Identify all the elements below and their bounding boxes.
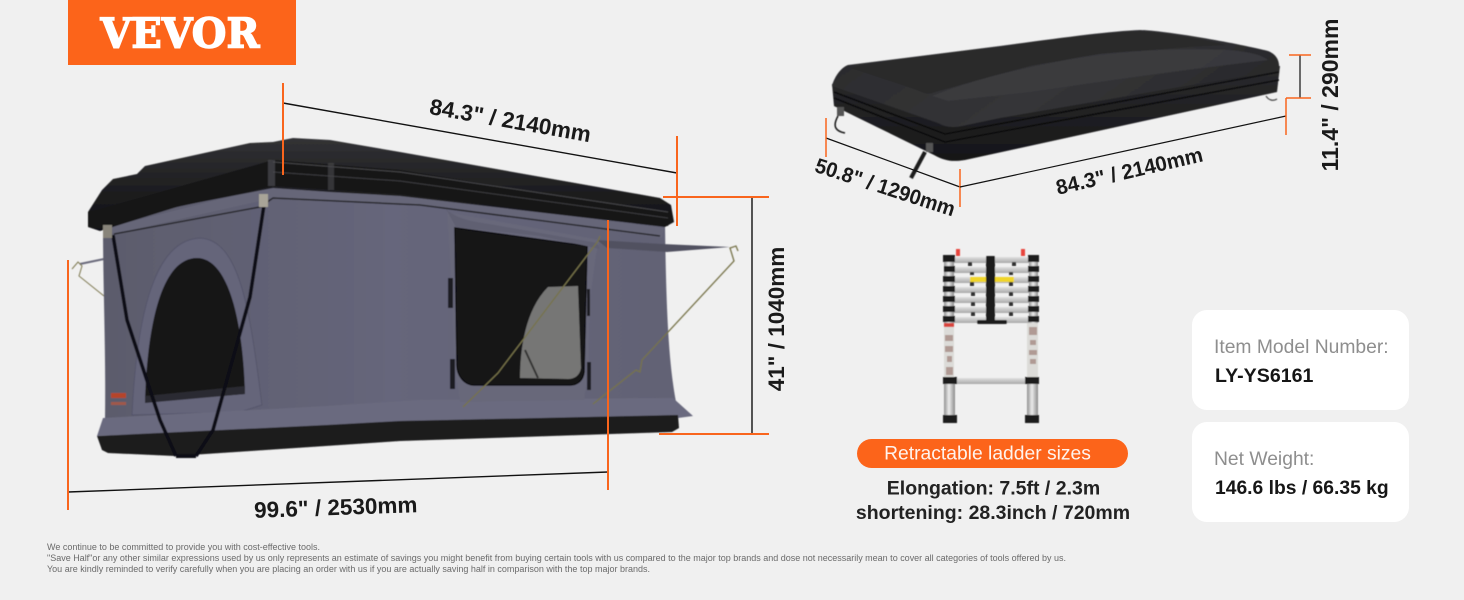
ladder: bottom rung and collars	[957, 378, 1025, 384]
ladder size text: shortening: 28.3inch / 720mm	[856, 502, 1130, 524]
card: item model number: LY-YS6161	[1215, 365, 1314, 387]
footnote disclaimer: You are kindly reminded to verify carefully when you are placing an order with us if you are actually saving half in comparison with the top major brands.	[47, 564, 650, 574]
shell: seam lines	[834, 72, 1279, 142]
tent: rear door opening	[446, 209, 730, 402]
ladder: rail collars	[943, 255, 1039, 322]
shell: base edge	[832, 66, 1280, 161]
footnote disclaimer: We continue to be committed to provide you with cost-effective tools.	[47, 542, 320, 552]
dimension: tent length top: 84.3" / 2140mm	[428, 94, 593, 147]
dimension: shell width	[812, 118, 960, 221]
dimension: tent height: 41" / 1040mm	[764, 247, 789, 391]
dimension: shell height	[1286, 19, 1343, 171]
ladder size text: Elongation: 7.5ft / 2.3m	[887, 478, 1100, 500]
footnote disclaimer: "Save Half"or any other similar expressions used by us only represents an estimate of savings you might benefit from buying certain tools with us compared to the major top brands and dose not necessarily mean to cover all categories of tools offered by us.	[47, 553, 1066, 563]
ladder size pill: Retractable ladder sizes	[884, 444, 1091, 464]
tent: upper canvas band	[105, 186, 664, 238]
tent: skirt	[97, 398, 693, 436]
tent: side window arch and mesh	[132, 238, 262, 415]
ladder: yellow label	[970, 277, 1014, 282]
footnote disclaimer	[47, 542, 1066, 574]
dimension: shell length	[960, 98, 1286, 200]
tent: strap buckles	[259, 194, 268, 207]
tent: base shell	[97, 415, 679, 456]
ladder: red top caps	[956, 249, 960, 256]
retractable ladder illustration	[943, 249, 1039, 423]
tent: rear support wire left	[72, 259, 104, 296]
logo: VEVOR	[68, 0, 296, 65]
card: item model number: Item Model Number:	[1214, 337, 1389, 358]
ladder size pill	[857, 439, 1128, 468]
dimension: shell length: 84.3" / 2140mm	[1054, 144, 1205, 200]
card: net weight	[1192, 422, 1409, 522]
closed tent shell illustration	[832, 30, 1280, 178]
card: net weight: 146.6 lbs / 66.35 kg	[1215, 478, 1389, 499]
tent: support wires	[463, 236, 738, 407]
logo: VEVOR: VEVOR	[100, 10, 260, 58]
dimension: shell width: 50.8" / 1290mm	[812, 154, 958, 221]
tent: lid shell	[88, 138, 674, 231]
tent: hold-down straps	[113, 205, 264, 456]
card: net weight: Net Weight:	[1214, 449, 1314, 470]
shell: latches and strap	[837, 107, 844, 116]
ladder: upper rail tubes	[944, 256, 954, 323]
ladder size text	[856, 478, 1130, 524]
ladder: small clips	[968, 262, 1016, 316]
dimension: tent height	[659, 197, 789, 434]
ladder: bottom tubes and feet	[944, 384, 955, 415]
tent: small brand mark	[111, 393, 126, 398]
dimension: tent open length bottom: 99.6" / 2530mm	[254, 492, 418, 523]
card: item model number	[1192, 310, 1409, 410]
tent: canvas body	[103, 180, 676, 420]
open roof tent illustration	[72, 138, 738, 456]
dimension: tent open length bottom	[68, 220, 608, 523]
ladder: lower rails with warning stickers	[944, 323, 954, 377]
dimension: tent length top	[283, 83, 677, 226]
shell: top surface	[832, 30, 1279, 127]
ladder: rungs	[954, 257, 1030, 323]
dimension: shell height: 11.4" / 290mm	[1317, 19, 1343, 171]
ladder: strap	[986, 256, 995, 321]
